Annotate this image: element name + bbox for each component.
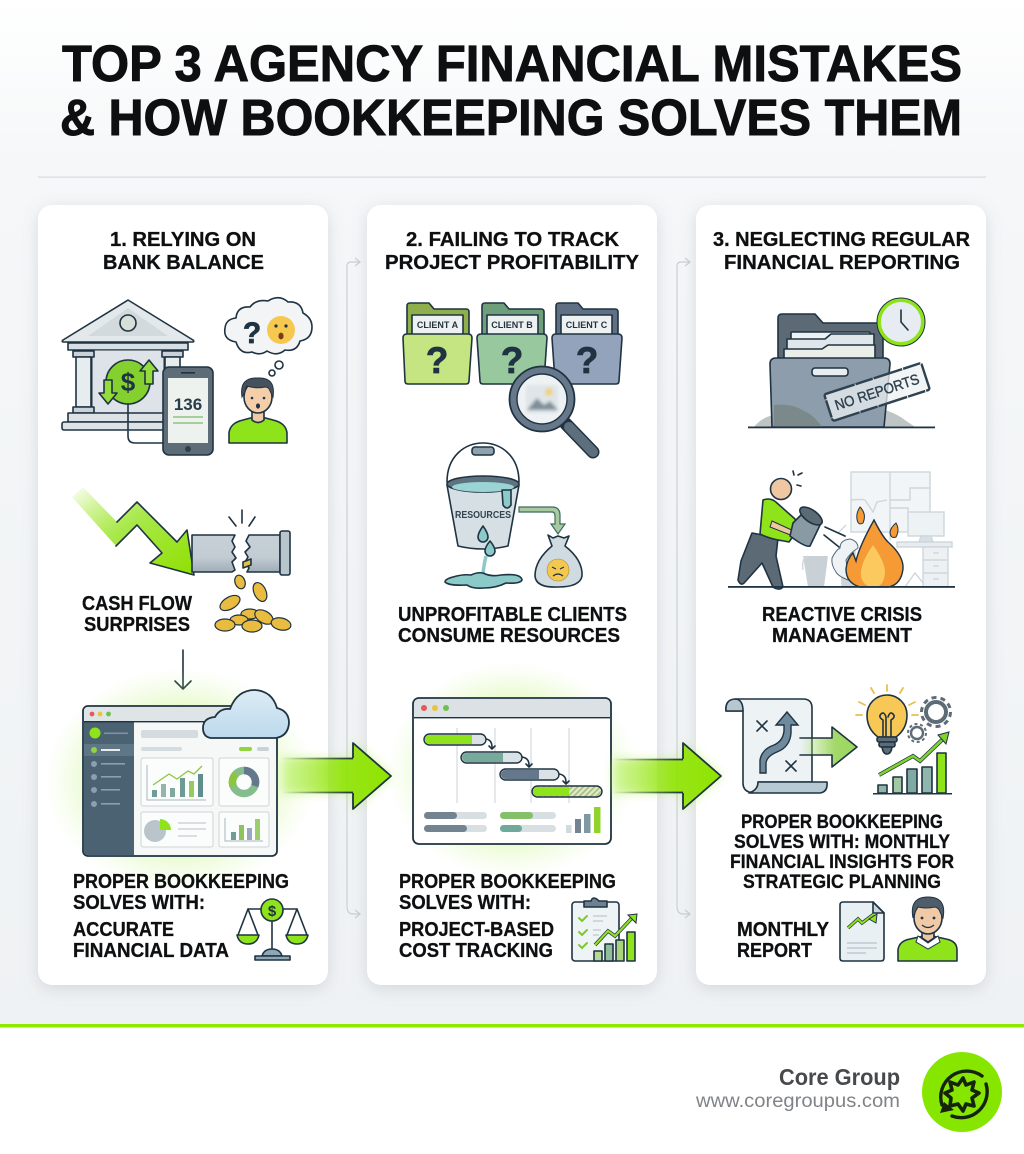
text: monthly report: MONTHLY	[737, 919, 830, 941]
text: cash flow surprises: SURPRISES	[84, 614, 190, 636]
icon: phone showing 136: 136	[174, 395, 202, 414]
gantt bars	[424, 734, 602, 797]
chart: pie and lines	[141, 812, 213, 847]
text: unprofitable clients consume resources: UNPROFITABLE CLIENTS	[398, 604, 627, 626]
text: monthly financial insights	[730, 811, 954, 893]
panel 2 heading	[385, 228, 639, 274]
chart: small bars	[219, 812, 269, 847]
brand name and url: Core Group	[779, 1064, 900, 1090]
icon: magnifying glass	[510, 366, 593, 452]
icon: client B folder: ?	[501, 340, 523, 381]
text: monthly report	[737, 919, 830, 962]
panel 1 heading	[103, 228, 264, 274]
text: monthly financial insights: STRATEGIC PLANNING	[743, 871, 941, 893]
dashboard glow	[45, 668, 315, 892]
gantt glow	[387, 662, 637, 878]
icon: dollar cash cycle with wire: $	[121, 367, 136, 397]
icon: dollar cash cycle with wire	[99, 360, 164, 443]
icon: green clock	[877, 298, 925, 346]
panel 1: relying on bank balance	[38, 205, 328, 985]
footer	[0, 1024, 1024, 1154]
big arrow: panel 2 to panel 3	[613, 742, 722, 810]
icon: growth bars	[873, 732, 952, 794]
icon: smiling accountant	[898, 897, 957, 961]
icon: gears	[908, 698, 950, 742]
icon: sad money bag	[535, 535, 582, 587]
icon: fire	[846, 507, 903, 587]
icon: client A folder: ?	[426, 340, 448, 381]
panel 3 heading: 3. NEGLECTING REGULAR	[713, 228, 970, 251]
icon: broken pipe	[192, 510, 290, 575]
text: accurate financial data	[73, 871, 289, 962]
icon: client A folder: CLIENT A	[417, 320, 459, 330]
stamp: no reports	[824, 363, 930, 421]
text: monthly financial insights: FINANCIAL INSIGHTS FOR	[730, 851, 954, 873]
text: project-based cost tracking: PROPER BOOKKEEPING	[399, 871, 616, 893]
text: reactive crisis management: REACTIVE CRISIS	[762, 604, 922, 626]
icon: client C folder: ?	[576, 340, 598, 381]
text: reactive crisis management	[762, 604, 922, 647]
arrow outline	[800, 727, 857, 767]
title	[60, 35, 962, 146]
icon: client C folder	[552, 303, 622, 384]
icon: clipboard with growth chart	[572, 898, 637, 961]
text: project-based cost tracking: SOLVES WITH:	[399, 892, 531, 914]
text: unprofitable clients consume resources	[398, 604, 627, 647]
illustration: gantt window	[413, 698, 611, 844]
text: monthly financial insights: SOLVES WITH: MONTHLY	[734, 831, 950, 853]
icon: leaking bucket	[445, 443, 522, 588]
icon: client B folder: CLIENT B	[491, 320, 533, 330]
chart: line and bars	[141, 758, 213, 806]
panel 2 heading: PROJECT PROFITABILITY	[385, 251, 639, 274]
logo	[922, 1052, 1002, 1132]
text: accurate financial data: SOLVES WITH:	[73, 892, 205, 914]
text: project-based cost tracking	[399, 871, 616, 962]
text: accurate financial data: FINANCIAL DATA	[73, 940, 229, 962]
title: & HOW BOOKKEEPING SOLVES THEM	[60, 89, 962, 146]
panel 1 heading: 1. RELYING ON	[110, 228, 256, 251]
panel 3 heading	[713, 228, 970, 274]
icon: phone showing 136	[163, 367, 213, 455]
panel 3: neglecting regular financial reporting	[696, 205, 986, 985]
icon: client B folder	[477, 303, 547, 384]
icon: balance scale: $	[268, 903, 277, 920]
icon: bank building	[62, 300, 194, 430]
icon: worried person	[229, 378, 287, 443]
text: monthly financial insights: PROPER BOOKKEEPING	[741, 811, 943, 833]
text: project-based cost tracking: COST TRACKING	[399, 940, 553, 962]
icon: spilled coins	[215, 574, 292, 632]
icon: strategy map scroll	[726, 699, 827, 793]
text: cash flow surprises	[82, 593, 192, 636]
icon: client C folder: CLIENT C	[566, 320, 608, 330]
brand name and url: www.coregroupus.com	[695, 1091, 900, 1112]
panel 1 heading: BANK BALANCE	[103, 251, 264, 274]
connector line between panels 1 and 2	[347, 258, 360, 918]
chart: donut	[219, 758, 269, 806]
panel 2: failing to track project profitability	[367, 205, 657, 985]
icon: lightbulb	[856, 685, 918, 754]
text: monthly report: REPORT	[737, 940, 812, 962]
illustration: dashboard window	[83, 706, 277, 856]
text: cash flow surprises: CASH FLOW	[82, 593, 192, 615]
big arrow: panel 1 to panel 2	[282, 742, 392, 810]
text: reactive crisis management: MANAGEMENT	[772, 625, 912, 647]
connector line between panels 2 and 3	[677, 258, 690, 918]
panel 2 heading: 2. FAILING TO TRACK	[406, 228, 619, 251]
icon: person with bucket	[738, 471, 825, 589]
icon: balance scale	[237, 899, 308, 960]
icon: client A folder	[403, 303, 472, 384]
text: accurate financial data: ACCURATE	[73, 919, 174, 941]
title: TOP 3 AGENCY FINANCIAL MISTAKES	[62, 35, 962, 92]
icon: thought cloud with question: ?	[243, 317, 261, 350]
arrow: leak to money bag	[519, 507, 565, 534]
icon: cloud	[203, 690, 289, 738]
icon: water splash	[824, 527, 858, 580]
brand name and url	[695, 1064, 900, 1112]
icon: leaking bucket: RESOURCES	[455, 509, 511, 521]
text: unprofitable clients consume resources: CONSUME RESOURCES	[398, 625, 620, 647]
icon: thought cloud with question	[225, 298, 312, 376]
illustration: office background	[803, 472, 952, 587]
icon: arrow head outline	[116, 502, 194, 575]
text: accurate financial data: PROPER BOOKKEEPING	[73, 871, 289, 893]
progress summaries	[424, 807, 600, 833]
icon: falling arrow	[72, 487, 194, 575]
stamp: no reports: NO REPORTS	[833, 372, 922, 414]
text: project-based cost tracking: PROJECT-BASED	[399, 919, 554, 941]
arrow: down to solution	[175, 650, 191, 689]
arrow: map to insights	[800, 727, 857, 767]
panel 3 heading: FINANCIAL REPORTING	[724, 251, 960, 274]
icon: report document	[840, 902, 884, 961]
icon: empty dusty folder	[748, 314, 935, 428]
